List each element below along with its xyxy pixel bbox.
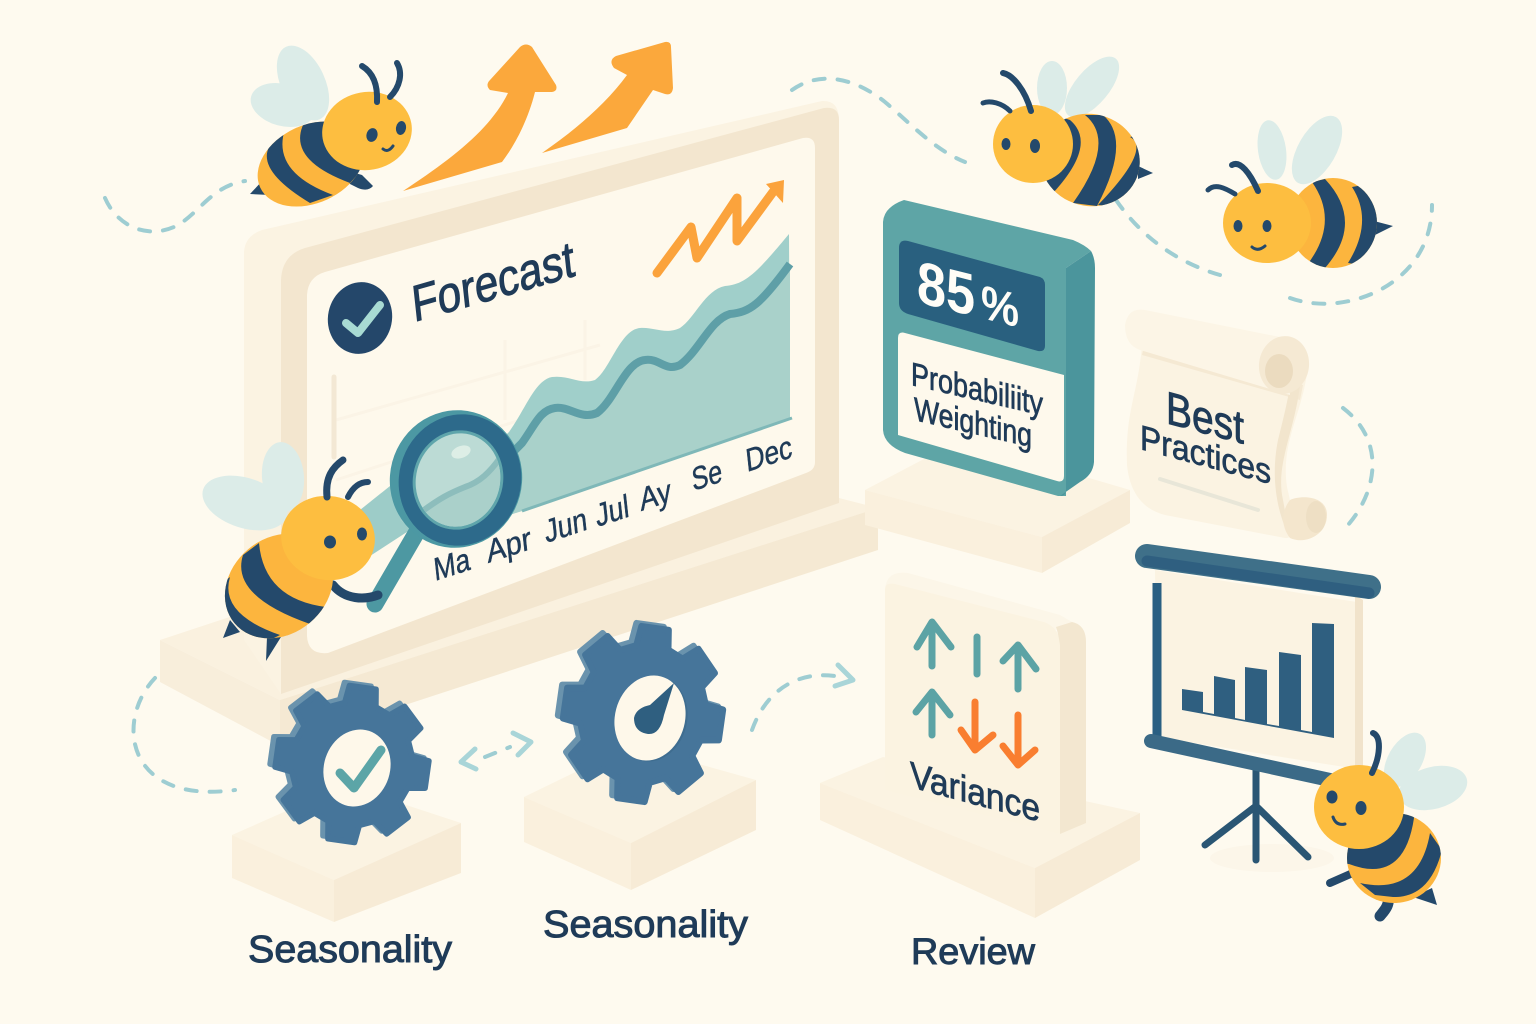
label: Seasonality left: Seasonality <box>248 929 452 971</box>
left pedestal <box>232 785 461 922</box>
small orange trend arrow <box>657 180 784 273</box>
card label: Weighting <box>914 391 1032 455</box>
presentation screen <box>1147 556 1369 872</box>
85% panel <box>899 241 1045 351</box>
chart: forecast area <box>360 234 792 556</box>
monitor platform base <box>160 498 878 746</box>
monitor outer frame <box>244 101 839 694</box>
card front <box>883 200 1091 496</box>
variance card <box>885 573 1086 834</box>
center pedestal <box>524 745 756 890</box>
scroll text line two: Practices <box>1140 418 1271 492</box>
chart axis line <box>332 377 336 457</box>
month labels: Se <box>690 454 724 499</box>
Forecast heading: Forecast <box>409 231 578 334</box>
month labels: Dec <box>744 429 794 480</box>
ground shadows <box>1210 844 1334 872</box>
label panel <box>898 333 1064 481</box>
bee: top center right <box>980 56 1153 206</box>
big orange growth arrow right <box>542 42 673 153</box>
scroll text: Best <box>1166 382 1244 454</box>
screen panel <box>1155 570 1363 770</box>
card label: Probabiliity <box>911 356 1043 423</box>
label: Review: Review <box>911 931 1035 972</box>
monitor <box>244 101 839 694</box>
screen top roller <box>1147 556 1369 593</box>
bee: top right <box>1208 108 1393 270</box>
month labels: Ma <box>432 542 472 589</box>
bee: top left <box>250 46 412 206</box>
screen stand <box>1205 770 1308 860</box>
gear: gauge <box>548 614 733 811</box>
double arrow between gears <box>461 733 531 769</box>
month labels: Jul <box>594 489 631 535</box>
screen bottom bar <box>1151 741 1330 780</box>
gear: check <box>261 674 438 851</box>
month labels: Ay <box>638 473 673 519</box>
pedestal under variance card <box>820 757 1140 918</box>
monitor screen <box>307 138 815 653</box>
month labels <box>432 429 794 589</box>
big orange growth arrow left <box>403 44 556 191</box>
label: Seasonality center: Seasonality <box>543 904 748 946</box>
arrowhead: dashed path to variance <box>835 665 853 686</box>
percent sign: % <box>981 276 1019 338</box>
Variance label: Variance <box>910 754 1040 830</box>
monitor tan bezel <box>281 108 839 694</box>
dashed flight paths <box>105 79 1432 792</box>
85% value: 85 <box>917 248 975 329</box>
month labels: Apr <box>485 521 533 571</box>
best practices scroll <box>1125 310 1327 540</box>
variance arrows <box>916 622 1036 765</box>
card side <box>1060 251 1095 496</box>
bee: holding magnifier <box>195 440 382 661</box>
probability card <box>883 200 1095 496</box>
month labels: Jun <box>543 502 589 551</box>
check badge <box>321 276 399 360</box>
pedestal under probability card <box>865 440 1130 573</box>
magnifying glass <box>374 395 538 604</box>
card label <box>911 356 1043 455</box>
faint grid <box>336 320 600 480</box>
bar chart <box>1182 623 1334 738</box>
bee: bottom right <box>1314 726 1472 916</box>
